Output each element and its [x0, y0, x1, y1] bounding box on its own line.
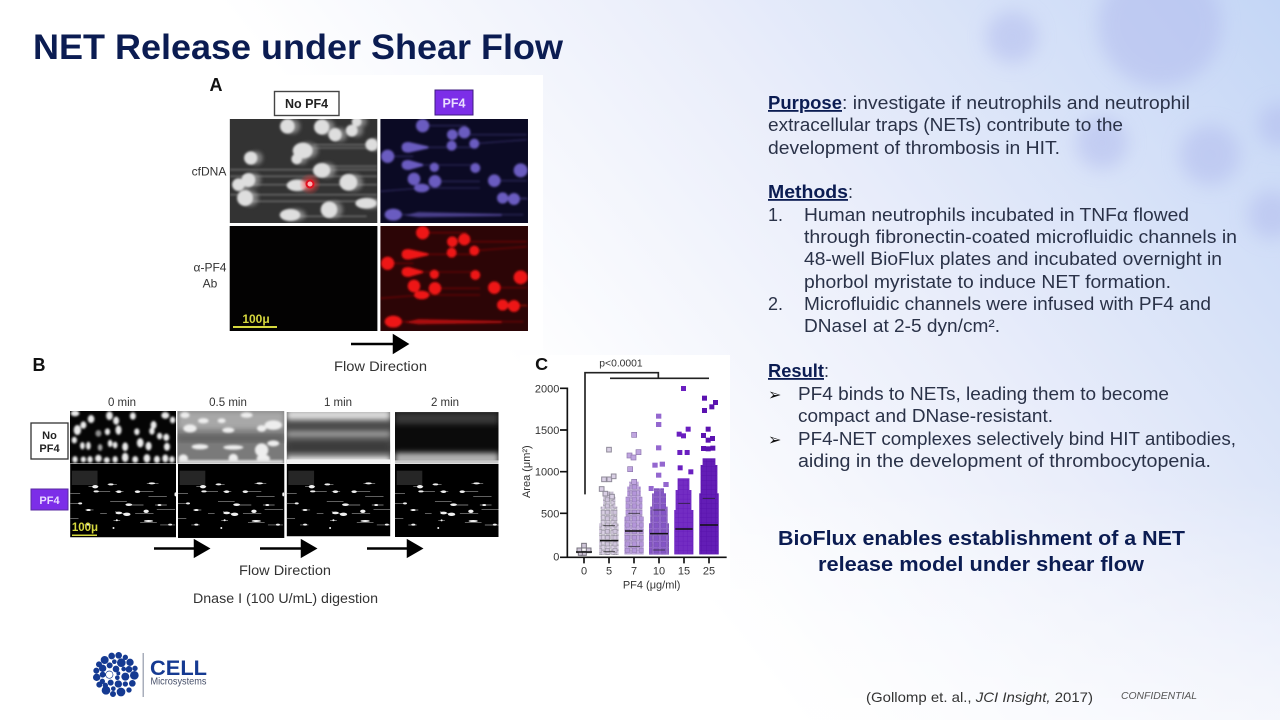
text block: result: PF4-NET complexes selectively bind HIT antibodies, — [798, 429, 1236, 449]
y axis tick labels: 500 — [541, 508, 559, 520]
text block: result: compact and DNase-resistant. — [798, 406, 1053, 426]
scale bar 100 micron — [233, 312, 277, 328]
No PF4 row label — [31, 423, 68, 459]
text block: result: ➢ — [768, 385, 781, 404]
text block: methods: 48-well BioFlux plates and incubated overnight in — [804, 249, 1222, 269]
text block: methods — [768, 182, 1237, 336]
time label 0 min: 0 min — [108, 397, 136, 409]
text block: purpose: extracellular traps (NETs) contribute to the — [768, 115, 1123, 135]
text block: purpose — [768, 93, 1190, 158]
red pointer dot — [299, 173, 321, 195]
x axis title: PF4 (μg/ml) — [623, 580, 680, 592]
flow arrow B1 — [154, 541, 208, 556]
text block: methods: phorbol myristate to induce NET formation. — [804, 272, 1171, 292]
logo wordmark: CELL — [150, 657, 207, 680]
y axis title: Area (μm²) — [521, 445, 533, 498]
logo divider — [142, 653, 144, 697]
text block: result: aiding in the development of thrombocytopenia. — [798, 451, 1211, 471]
text block: methods: through fibronectin-coated microfluidic channels in — [804, 227, 1237, 247]
Cell Microsystems logo — [93, 652, 207, 697]
scatter points — [576, 386, 719, 555]
flow arrow B3 — [367, 541, 421, 556]
text block: result: : — [824, 361, 829, 381]
PF4 column label: PF4 — [443, 96, 466, 110]
panel B: DNase digestion time course — [31, 355, 501, 606]
frame 2 min PF4 — [395, 464, 498, 537]
key takeaway: BioFlux enables establishment of a NET — [778, 527, 1185, 550]
row label anti-PF4 Ab: α-PF4 — [194, 260, 226, 274]
x axis tick labels: 15 — [678, 566, 690, 578]
time label 1 min: 1 min — [324, 397, 352, 409]
time label 0.5 min: 0.5 min — [209, 397, 247, 409]
frame 1 min no PF4 — [286, 412, 390, 464]
text block: result: ➢ — [768, 430, 781, 449]
x axis tick labels: 10 — [653, 566, 665, 578]
digestion caption: Dnase I (100 U/mL) digestion — [193, 591, 378, 606]
key takeaway: release model under shear flow — [818, 553, 1144, 576]
text block: result: PF4 binds to NETs, leading them to become — [798, 384, 1169, 404]
chart axes — [560, 388, 727, 563]
text block: result: Result — [768, 361, 824, 381]
No PF4 row label: PF4 — [39, 443, 60, 455]
No PF4 column label: No PF4 — [285, 97, 328, 111]
text block: methods: 1. — [768, 205, 783, 225]
panel C: scatter chart of NET area vs PF4 — [520, 354, 730, 600]
panel A: microscopy comparison — [180, 75, 543, 374]
flow direction label A: Flow Direction — [334, 359, 427, 374]
flow direction label B: Flow Direction — [239, 563, 331, 578]
text block: purpose: development of thrombosis in HIT. — [768, 138, 1060, 158]
significance bracket — [585, 359, 709, 494]
PF4 row label — [31, 489, 68, 510]
flow arrow B2 — [260, 541, 315, 556]
frame 0 min PF4 — [70, 464, 176, 538]
text block: purpose: : investigate if neutrophils and neutrophil — [842, 93, 1190, 113]
micrograph: cfDNA no PF4 — [230, 119, 378, 223]
frame 0.5 min PF4 — [178, 464, 284, 538]
text block: methods: Methods — [768, 182, 848, 202]
frame 0.5 min no PF4 — [177, 411, 284, 464]
y axis tick labels: 1000 — [535, 467, 559, 479]
PF4 column label — [435, 90, 473, 115]
text block: purpose: Purpose — [768, 93, 842, 113]
significance bracket: p<0.0001 — [599, 359, 643, 370]
time label 2 min: 2 min — [431, 397, 459, 409]
x axis tick labels: 25 — [703, 566, 715, 578]
logo wordmark: Microsystems — [150, 676, 206, 688]
text block: methods: Microfluidic channels were infused with PF4 and — [804, 294, 1211, 314]
confidential mark: CONFIDENTIAL — [1121, 690, 1197, 702]
No PF4 column label — [274, 92, 339, 116]
micrograph: cfDNA with PF4 — [380, 119, 528, 223]
flow arrow A — [351, 336, 407, 352]
frame 1 min PF4 — [286, 464, 390, 536]
y axis tick labels: 1500 — [535, 425, 559, 437]
scale bar 100 micron: 100μ — [242, 312, 270, 326]
text block: methods: Human neutrophils incubated in TNFα flowed — [804, 205, 1189, 225]
title: NET Release under Shear Flow — [33, 28, 564, 67]
text block: methods: DNaseI at 2-5 dyn/cm². — [804, 316, 1000, 336]
citation: (Gollomp et. al., JCI Insight, 2017) — [866, 689, 1093, 705]
panel letter B: B — [32, 355, 46, 375]
No PF4 row label: No — [42, 430, 57, 442]
frame 2 min no PF4 — [395, 412, 498, 464]
x axis tick labels: 5 — [606, 566, 612, 578]
PF4 row label: PF4 — [39, 495, 60, 507]
text block: methods: : — [848, 182, 853, 202]
y axis tick labels: 2000 — [535, 383, 559, 395]
icon: cell cluster — [93, 652, 138, 697]
frame 0 min no PF4 — [70, 411, 176, 464]
panel letter A: A — [210, 75, 222, 95]
text block: result — [768, 361, 1236, 471]
y axis tick labels — [535, 383, 559, 564]
row label anti-PF4 Ab: Ab — [203, 276, 218, 290]
x axis tick labels: 7 — [631, 566, 637, 578]
panel letter C: C — [535, 354, 548, 374]
row label cfDNA: cfDNA — [192, 164, 226, 178]
text block: methods: 2. — [768, 294, 783, 314]
scale bar 100 micron B: 100μ — [72, 522, 98, 534]
y axis tick labels: 0 — [553, 552, 559, 564]
micrograph: anti-PF4 no PF4 — [230, 226, 377, 331]
key takeaway — [778, 527, 1185, 576]
x axis tick labels: 0 — [581, 566, 587, 578]
micrograph: anti-PF4 with PF4 — [380, 226, 528, 331]
x axis tick labels — [581, 566, 715, 578]
